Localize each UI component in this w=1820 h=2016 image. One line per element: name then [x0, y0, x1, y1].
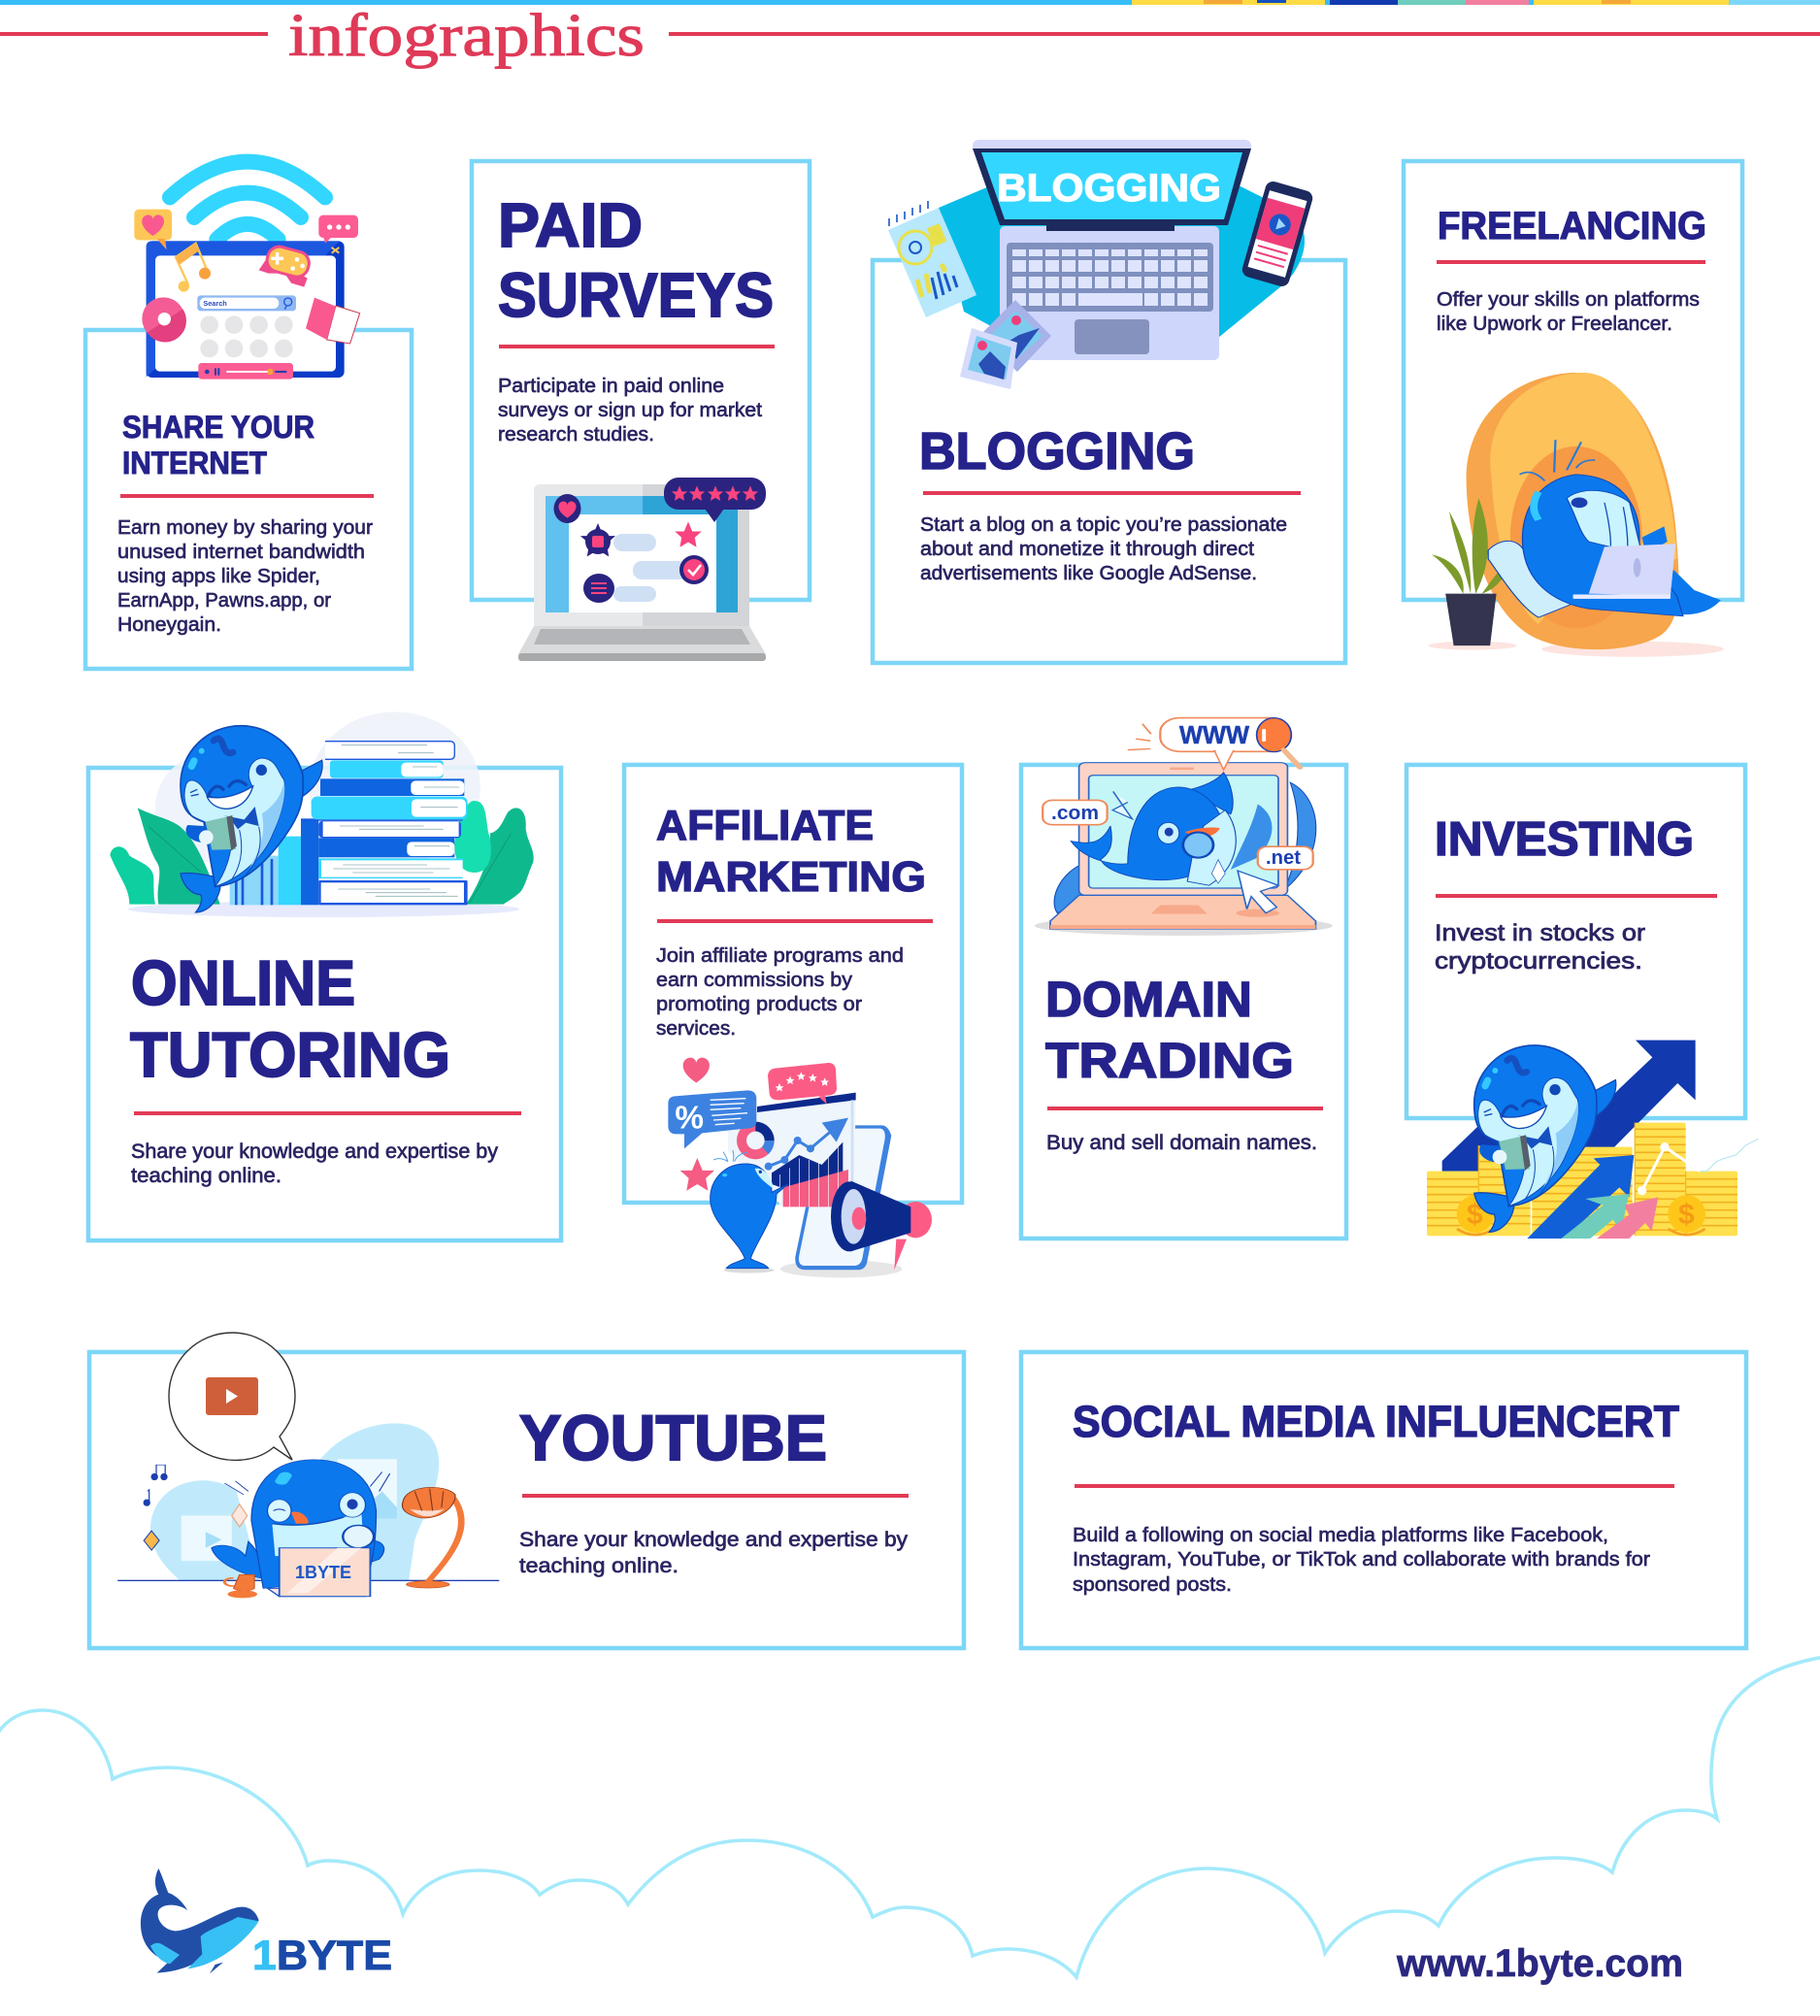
- body text: [920, 513, 1287, 584]
- illustration: whale marketing with phone and megaphone: %: [675, 1101, 704, 1137]
- illustration: whale and books: [110, 711, 534, 917]
- divider: [120, 494, 374, 498]
- panel frame: [873, 260, 1345, 663]
- body text: Start a blog on a topic you’re passionate: [920, 513, 1287, 536]
- body text: unused internet bandwidth: [117, 541, 365, 563]
- illustration: wifi and browser window: [134, 162, 360, 380]
- title: infographics: [0, 3, 1820, 69]
- heading: TRADING: [1045, 1033, 1294, 1088]
- divider: [522, 1494, 909, 1498]
- panel: freelancing: [1404, 161, 1742, 657]
- heading: [1045, 972, 1294, 1088]
- heading: [656, 802, 926, 901]
- top colour bar: [0, 0, 1820, 5]
- panel frame: [624, 765, 962, 1203]
- logo wordmark: 1BYTE: [252, 1933, 392, 1979]
- .com label: .com: [1051, 803, 1099, 824]
- heading: YOUTUBE: [519, 1402, 827, 1473]
- icon: whale logo: [141, 1868, 259, 1973]
- body text: [117, 516, 373, 636]
- website url: www.1byte.com: [1396, 1942, 1683, 1985]
- body text: Share your knowledge and expertise by: [131, 1140, 499, 1163]
- divider: [499, 345, 775, 348]
- title: infographics: infographics: [288, 3, 645, 69]
- heading: ONLINE: [131, 947, 355, 1018]
- body text: Share your knowledge and expertise by: [519, 1529, 909, 1551]
- heading: [122, 410, 314, 480]
- body text: Invest in stocks or: [1435, 920, 1645, 946]
- panel: affiliate marketing: [624, 765, 962, 1277]
- panel: social media influencer: [1021, 1352, 1746, 1648]
- panel frame: [472, 161, 810, 600]
- divider: [657, 919, 933, 923]
- heading: MARKETING: [656, 853, 926, 901]
- panel: youtube: [89, 1333, 964, 1648]
- panel: paid surveys: [472, 161, 810, 661]
- coin dollar signs: $: [1467, 1199, 1483, 1231]
- panel frame: [88, 768, 561, 1240]
- body text: [498, 375, 762, 446]
- body text: Honeygain.: [117, 613, 221, 636]
- icon: whale mascot: [1474, 1045, 1616, 1232]
- body text: [1437, 288, 1700, 335]
- heading: BLOGGING: [919, 422, 1195, 480]
- body text: Instagram, YouTube, or TikTok and collaborate with brands for: [1073, 1548, 1650, 1570]
- body text: Earn money by sharing your: [117, 516, 373, 539]
- footer cloud outline: [0, 1657, 1820, 1977]
- panel: blogging: [873, 140, 1345, 663]
- logo: 1BYTE whale: [141, 1868, 392, 1979]
- heading: [130, 947, 450, 1090]
- panel: share your internet: [85, 162, 412, 669]
- divider: [134, 1111, 521, 1115]
- heading: SURVEYS: [498, 260, 774, 330]
- speech bubble with play button: [169, 1333, 295, 1460]
- illustration: whale on bean bag: [1429, 373, 1724, 657]
- illustration: whale marketing with phone and megaphone: [668, 1058, 932, 1277]
- illustration: whale with coins and arrows: [1427, 1041, 1759, 1239]
- coin dollar signs: $: [1678, 1199, 1695, 1231]
- divider: [1047, 1107, 1323, 1110]
- body text: EarnApp, Pawns.app, or: [117, 589, 331, 611]
- body text: [1073, 1524, 1650, 1596]
- body text: teaching online.: [131, 1165, 281, 1187]
- illustration: whale at laptop: [117, 1423, 499, 1598]
- panel: investing: [1406, 765, 1759, 1239]
- heading: PAID: [498, 190, 643, 260]
- .net label: .net: [1266, 847, 1301, 869]
- panel frame: [1406, 765, 1745, 1118]
- panel frame: [1404, 161, 1742, 600]
- laptop logo text: 1BYTE: [295, 1563, 351, 1582]
- divider: [1075, 1484, 1674, 1488]
- illustration: whale and domains: [1035, 718, 1333, 936]
- divider: [1436, 894, 1717, 898]
- body text: services.: [656, 1017, 736, 1040]
- coin dollar signs: [1467, 1199, 1695, 1231]
- panel: domain trading: [1021, 718, 1346, 1239]
- divider: [923, 491, 1301, 495]
- body text: research studies.: [498, 423, 654, 446]
- body text: promoting products or: [656, 993, 862, 1015]
- illustration: wifi and browser window: Search: [203, 299, 227, 308]
- body text: Buy and sell domain names.: [1046, 1132, 1317, 1154]
- heading: TUTORING: [130, 1019, 450, 1090]
- heading: INTERNET: [122, 446, 267, 480]
- body text: about and monetize it through direct: [920, 538, 1254, 560]
- body text: Build a following on social media platforms like Facebook,: [1073, 1524, 1608, 1546]
- body text: [1435, 920, 1645, 975]
- body text: [656, 944, 904, 1040]
- body text: Offer your skills on platforms: [1437, 288, 1700, 311]
- panel frame: [1021, 765, 1346, 1239]
- body text: advertisements like Google AdSense.: [920, 562, 1257, 584]
- heading: AFFILIATE: [656, 802, 874, 849]
- body text: surveys or sign up for market: [498, 399, 762, 421]
- body text: using apps like Spider,: [117, 565, 320, 587]
- illustration: blogging laptop: [888, 140, 1314, 389]
- panel frame: [85, 330, 412, 669]
- heading: SOCIAL MEDIA INFLUENCERT: [1073, 1397, 1679, 1446]
- heading: DOMAIN: [1045, 972, 1252, 1027]
- panel frame: [89, 1352, 964, 1648]
- illustration: blogging laptop: BLOGGING: [997, 167, 1221, 210]
- body text: cryptocurrencies.: [1435, 948, 1642, 975]
- panel: online tutoring: [88, 711, 561, 1240]
- body text: Join affiliate programs and: [656, 944, 904, 967]
- heading: [498, 190, 774, 330]
- body text: sponsored posts.: [1073, 1573, 1232, 1596]
- heading: INVESTING: [1435, 813, 1694, 866]
- body text: Participate in paid online: [498, 375, 724, 397]
- heading: SHARE YOUR: [122, 410, 314, 445]
- heading: FREELANCING: [1438, 205, 1706, 248]
- illustration: survey laptop: [518, 478, 766, 661]
- body text: [131, 1140, 499, 1187]
- divider: [1437, 260, 1705, 264]
- body text: earn commissions by: [656, 969, 853, 991]
- body text: teaching online.: [519, 1555, 678, 1577]
- body text: [519, 1529, 909, 1577]
- panel frame: [1021, 1352, 1746, 1648]
- body text: like Upwork or Freelancer.: [1437, 313, 1672, 335]
- www label: WWW: [1179, 720, 1249, 749]
